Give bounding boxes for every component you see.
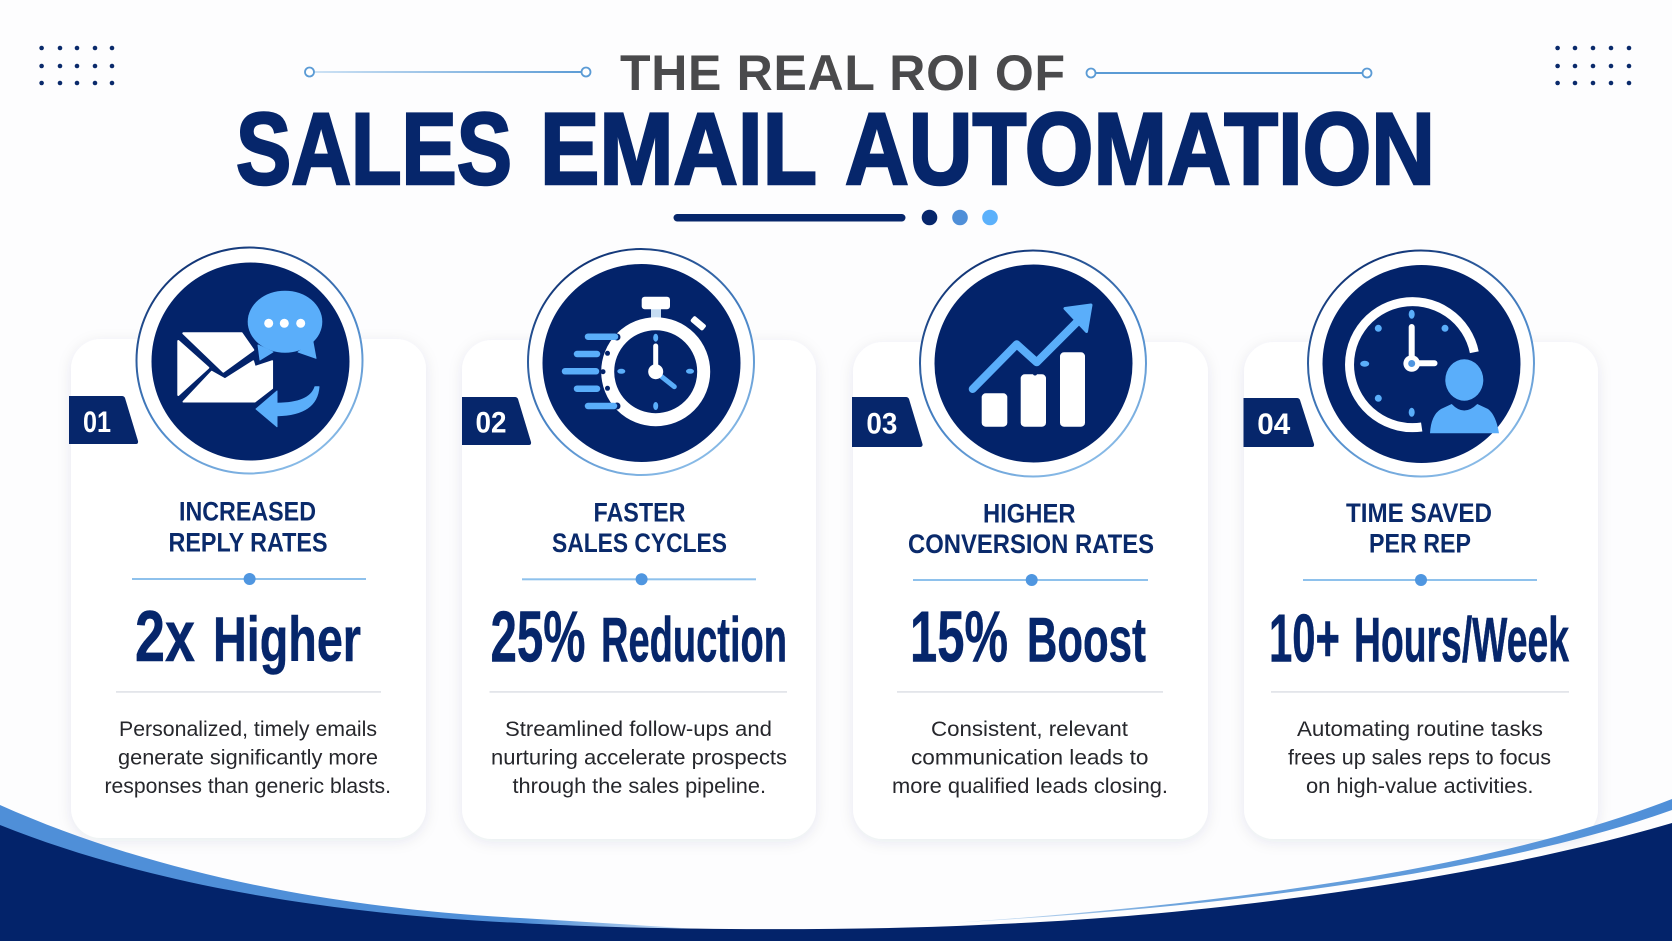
badge 03 (852, 397, 923, 447)
divider with dot (522, 573, 756, 585)
description: frees up sales reps to focus (1288, 746, 1551, 770)
description (491, 717, 787, 798)
panel: increased reply rates (69, 248, 426, 838)
metric (910, 598, 1146, 678)
description: communication leads to (911, 746, 1149, 770)
bottom wave (0, 799, 1672, 941)
description (1288, 717, 1551, 798)
heading (908, 498, 1154, 559)
metric: Reduction (601, 606, 787, 676)
title connector: left (305, 68, 590, 76)
metric: 15% (910, 598, 1008, 678)
heading: TIME SAVED (1346, 498, 1492, 528)
icon: envelope with chat bubble and reply arrow (136, 248, 362, 474)
title line 1: THE REAL ROI OF (620, 45, 1065, 101)
heading: FASTER (594, 498, 686, 528)
heading: SALES CYCLES (552, 528, 727, 558)
description: through the sales pipeline. (512, 774, 766, 798)
badge 01: 01 (83, 406, 111, 439)
metric: 10+ (1269, 600, 1340, 676)
description: more qualified leads closing. (892, 774, 1168, 798)
metric: 2x (135, 597, 195, 677)
decorative dot grid: left (39, 46, 114, 85)
description: generate significantly more (118, 746, 378, 770)
divider with dot (132, 573, 366, 585)
badge 03: 03 (866, 407, 897, 440)
title line 2: AUTOMATION (845, 92, 1435, 206)
title line 2: SALES (236, 92, 512, 206)
heading: CONVERSION RATES (908, 529, 1154, 559)
description: Automating routine tasks (1297, 717, 1543, 741)
icon: clock with person (1308, 250, 1534, 476)
heading (552, 498, 727, 558)
heading: PER REP (1369, 529, 1471, 559)
badge 02 (462, 397, 531, 445)
badge 04 (1244, 398, 1314, 447)
description: responses than generic blasts. (104, 774, 391, 798)
heading: HIGHER (983, 498, 1076, 528)
heading: INCREASED (179, 496, 316, 526)
description (892, 717, 1168, 798)
metric (1269, 600, 1570, 676)
description (104, 717, 391, 798)
metric (135, 597, 361, 677)
title connector: right (1086, 68, 1372, 78)
heading (1346, 498, 1492, 559)
panel: time saved per rep (1244, 250, 1598, 839)
metric (490, 598, 787, 678)
title line 2: EMAIL (540, 92, 817, 206)
description: on high-value activities. (1306, 774, 1534, 798)
panel: faster sales cycles (462, 249, 816, 839)
title divider (674, 210, 998, 225)
panel: higher conversion rates (852, 250, 1208, 839)
metric: Boost (1027, 606, 1146, 676)
divider with dot (913, 574, 1148, 586)
description: Consistent, relevant (931, 717, 1128, 741)
heading (168, 496, 328, 558)
icon: stopwatch with speed lines (528, 249, 754, 475)
icon: rising chart (920, 250, 1146, 476)
description: nurturing accelerate prospects (491, 746, 787, 770)
divider with dot (1303, 574, 1537, 586)
badge 04: 04 (1257, 408, 1291, 441)
metric: 25% (490, 598, 586, 678)
badge 02: 02 (476, 407, 506, 440)
metric: Higher (213, 605, 361, 675)
title line 2 (236, 92, 1435, 206)
decorative dot grid: right (1555, 46, 1631, 85)
badge 01 (69, 396, 138, 444)
heading: REPLY RATES (168, 528, 328, 558)
description: Personalized, timely emails (119, 717, 377, 741)
description: Streamlined follow-ups and (505, 717, 772, 741)
